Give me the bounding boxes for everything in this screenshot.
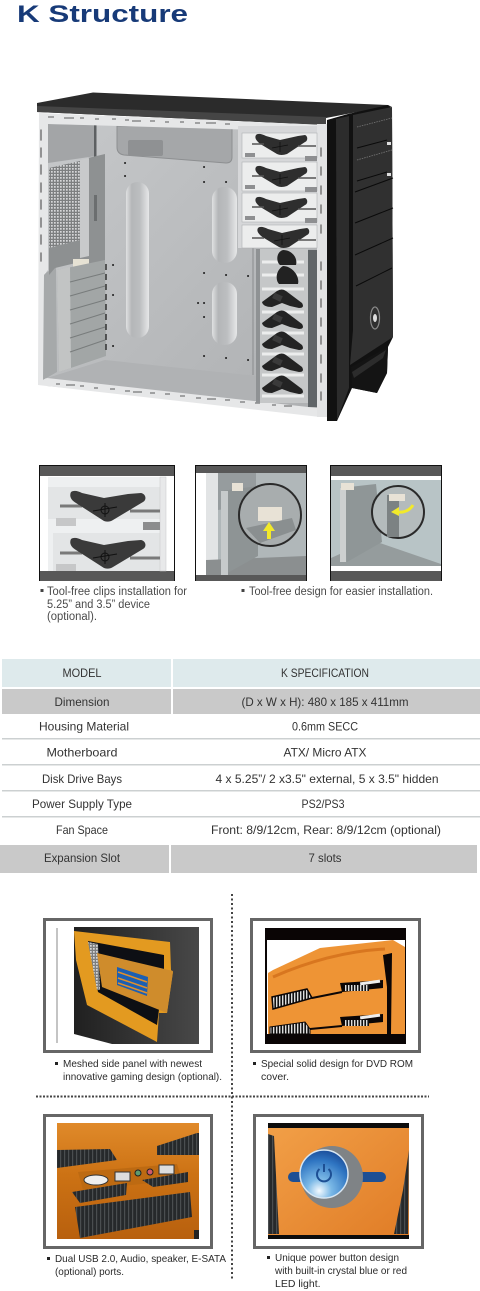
feature photo: front ports: [44, 1116, 212, 1248]
motherboard tray cut-out: [117, 126, 232, 163]
feature caption: DVD ROM cover: [253, 1058, 413, 1083]
feature caption: DVD ROM cover: cover.: [261, 1071, 289, 1083]
case interior back wall: [46, 122, 320, 412]
feature caption: power button: LED light.: [275, 1278, 321, 1290]
rear I/O plate: [74, 154, 105, 268]
standoff holes: [113, 163, 248, 360]
row: dimension: [2, 689, 480, 714]
metal frame rails: [38, 113, 327, 417]
power supply bay shadow: [48, 124, 96, 163]
feature photo: DVD ROM cover: [252, 920, 420, 1052]
row: housing material: Housing Material: [39, 720, 129, 734]
row: power supply type: Power Supply Type: [32, 797, 132, 811]
row: expansion slot: [0, 845, 477, 873]
feature caption: front ports: [47, 1253, 226, 1278]
caption: tool-free clips: [40, 586, 187, 623]
feature caption: power button: Unique power button design: [275, 1252, 399, 1264]
hidden lower drive cage: [256, 249, 317, 407]
feature photo: power button: [254, 1116, 422, 1248]
table header row: [2, 659, 480, 687]
feature caption: meshed side panel: Meshed side panel with newest: [63, 1058, 202, 1070]
detail photo: tool-free clips: [40, 466, 174, 581]
magnifier circle with yellow arrow: [239, 484, 301, 546]
feature caption: meshed side panel: innovative gaming design (optional).: [63, 1071, 222, 1083]
row: motherboard: Motherboard: [46, 746, 118, 760]
row: disk drive bays: 4 x 5.25”/ 2 x3.5" external, 5 x 3.5" hidden: [216, 772, 438, 786]
row: dimension: Dimension: [54, 695, 110, 709]
row: expansion slot: 7 slots: [308, 851, 342, 865]
row: motherboard: ATX/ Micro ATX: [284, 746, 366, 760]
row: motherboard: [2, 746, 480, 766]
feature caption: DVD ROM cover: Special solid design for DVD ROM: [261, 1058, 413, 1070]
caption: tool-free clips: Tool-free clips installation for: [47, 586, 187, 598]
table header row: MODEL: [62, 666, 102, 680]
row: housing material: 0.6mm SECC: [292, 720, 358, 734]
row: expansion slot: Expansion Slot: [44, 851, 121, 865]
row: fan space: Fan Space: [56, 823, 108, 837]
expansion slots: [57, 260, 106, 372]
caption: tool-free design: Tool-free design for easier installation.: [249, 586, 433, 598]
row: fan space: Front: 8/9/12cm, Rear: 8/9/12cm (optional): [211, 823, 441, 837]
power button: [370, 307, 380, 329]
title: K Structure: [17, 1, 188, 28]
main image: open computer case: [37, 92, 393, 421]
magnifier circle with yellow curved arrow: [372, 486, 424, 538]
row: disk drive bays: Disk Drive Bays: [42, 772, 122, 786]
row: disk drive bays: [2, 772, 480, 792]
row: housing material: [2, 720, 480, 740]
caption: tool-free clips: (optional).: [47, 611, 97, 623]
power button dial: [300, 1146, 363, 1208]
specification table: [0, 659, 480, 873]
floor panel: [47, 360, 320, 412]
feature caption: meshed side panel: [55, 1058, 222, 1083]
row: power supply type: PS2/PS3: [302, 797, 345, 811]
upper drive bays with tool-free clips: [238, 126, 317, 248]
feature caption: power button: with built-in crystal blue or red: [274, 1265, 407, 1277]
rear vent mesh: [49, 161, 80, 248]
row: power supply type: [2, 797, 480, 818]
feature caption: front ports: Dual USB 2.0, Audio, speaker, E-SATA: [55, 1253, 226, 1265]
feature caption: front ports: (optional) ports.: [55, 1266, 124, 1278]
feature caption: power button: [267, 1252, 407, 1290]
top panel: [37, 92, 392, 125]
detail photo: tool-free card latch: [330, 466, 442, 581]
tray reliefs: [126, 182, 149, 338]
black front bezel: [327, 105, 393, 421]
feature photo: meshed side panel: [44, 920, 212, 1052]
drive bay lines on front: [355, 140, 393, 286]
row: dimension: (D x W x H): 480 x 185 x 411mm: [242, 695, 409, 709]
table header row: K SPECIFICATION: [281, 666, 369, 680]
row: fan space: [56, 823, 441, 837]
caption: tool-free clips: 5.25” and 3.5” device: [47, 599, 150, 611]
detail photo: expansion slot clip: [196, 466, 306, 581]
